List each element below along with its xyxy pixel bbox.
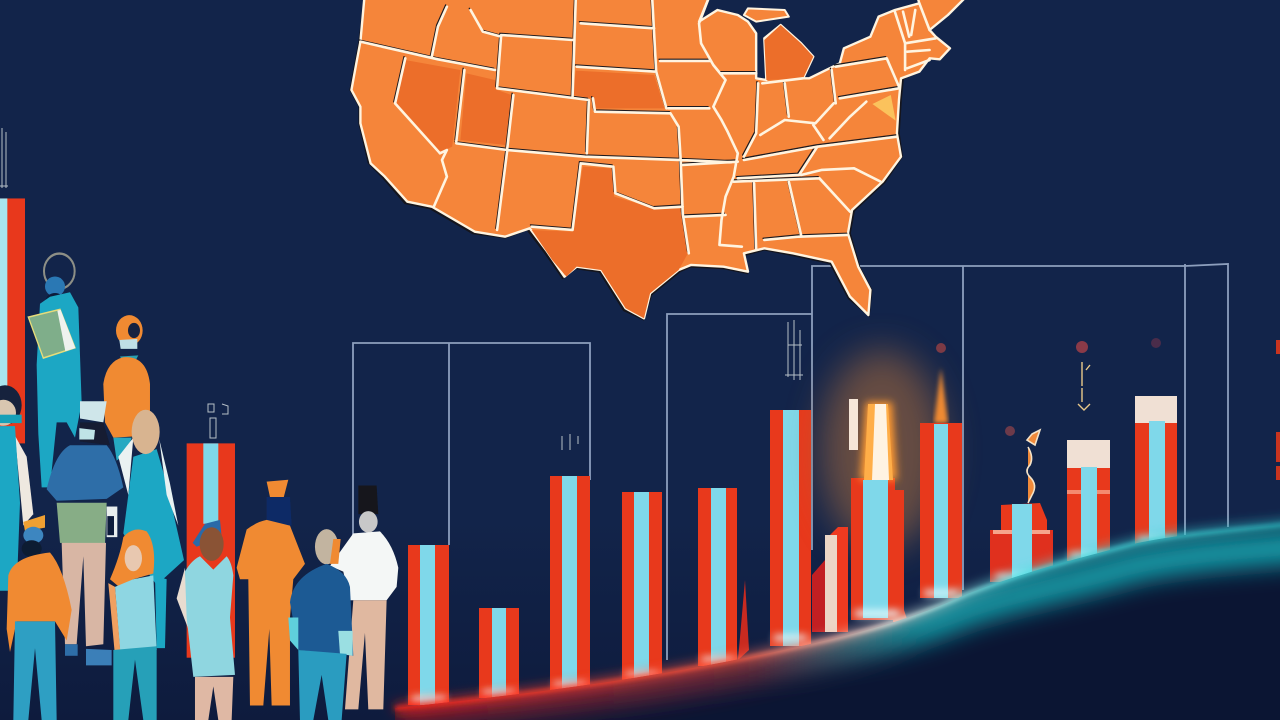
- person in orange, bottom left: [7, 515, 72, 720]
- crowd of people: [0, 198, 398, 720]
- bar 12 with white cap: [1135, 338, 1177, 545]
- Nevada: [395, 60, 460, 153]
- right edge marks: [1276, 340, 1280, 480]
- person in orange jumpsuit: [237, 480, 305, 706]
- central red bar behind people: [187, 443, 235, 658]
- Nebraska: [573, 71, 664, 108]
- ground curve: [395, 523, 1280, 720]
- bar 8 glow haze: [820, 350, 944, 550]
- bar 2: [479, 608, 519, 698]
- shaded states: [395, 25, 813, 318]
- person in blue jacket with cap: [47, 401, 123, 665]
- glow at bar feet: [412, 537, 1174, 703]
- map drop shadow: [349, 0, 911, 321]
- Michigan: [764, 25, 813, 80]
- bar 1: [408, 545, 449, 705]
- state border shadows: [359, 0, 898, 252]
- teal legs behind woman: [155, 575, 167, 648]
- bar chart: [408, 338, 1177, 705]
- Utah: [460, 73, 511, 145]
- person in white sweater: [330, 485, 398, 709]
- person with book: [28, 254, 82, 487]
- state borders: [360, 0, 936, 253]
- bar 4: [622, 492, 662, 680]
- left edge bar: [0, 198, 25, 443]
- bar 11 with white cap: [1067, 341, 1110, 561]
- far left person: [0, 385, 33, 591]
- Michigan upper peninsula: [744, 8, 789, 22]
- Chesapeake highlight: [872, 95, 896, 121]
- map silhouette: [351, 0, 966, 318]
- bar 3: [550, 476, 590, 690]
- woman in light blue dress: [177, 520, 235, 720]
- bar 8 glowing: [849, 399, 908, 622]
- chart frames: [353, 264, 1228, 660]
- bar 5: [698, 488, 749, 666]
- bar annotations: [0, 128, 1090, 503]
- person in dark blue jacket: [288, 529, 353, 720]
- map of the United States: [349, 0, 966, 321]
- bar 10 stepped: [990, 426, 1053, 582]
- woman with orange hair: [108, 529, 157, 720]
- woman in teal dress: [107, 410, 184, 585]
- Texas: [532, 167, 689, 318]
- bar 9 with flame: [920, 343, 962, 598]
- bar 7 small pale: [812, 527, 848, 632]
- person in orange with helmet: [103, 315, 150, 461]
- bar 6: [770, 410, 811, 646]
